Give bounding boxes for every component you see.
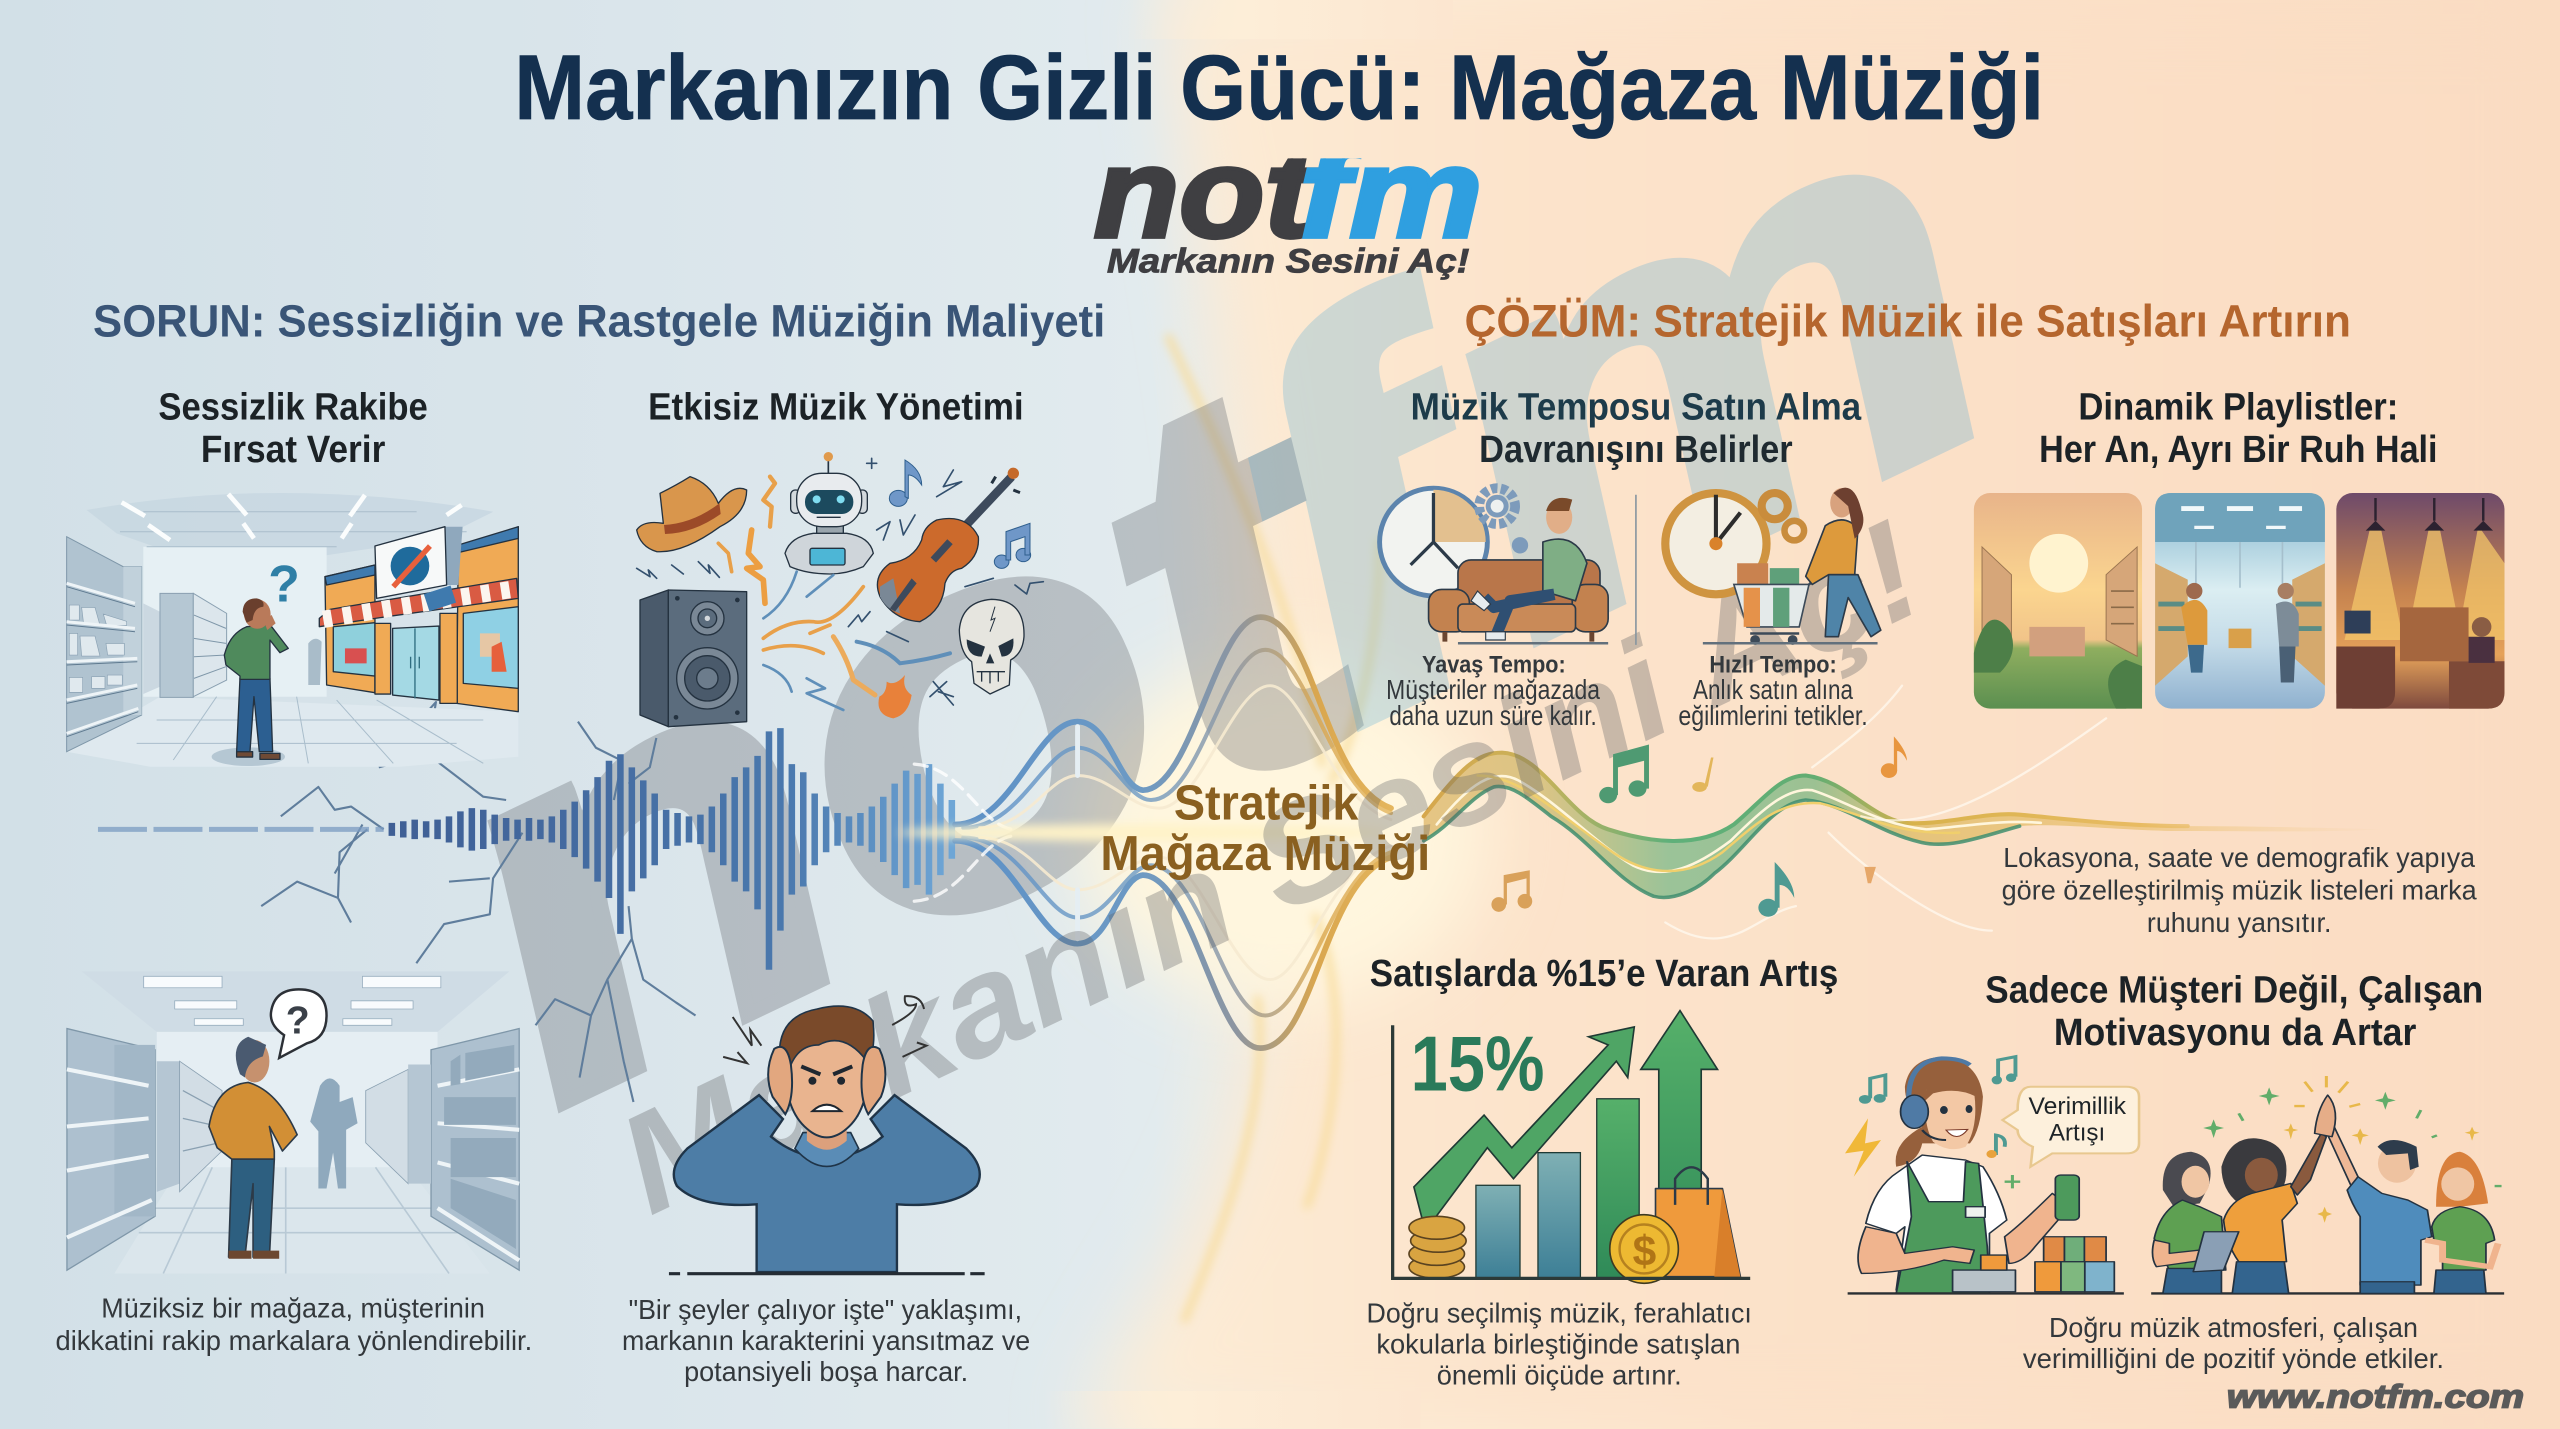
illustration: slow tempo bbox=[1380, 488, 1608, 643]
stat: 15%: 15% bbox=[1411, 1020, 1544, 1108]
text: employees caption: Doğru müzik atmosferi, çalışan bbox=[2049, 1312, 2418, 1343]
speech bubble: Artışı bbox=[2049, 1119, 2105, 1146]
icon: robot bbox=[785, 452, 873, 574]
axes bbox=[1393, 1025, 1750, 1278]
subheading: sales: Satışlarda %15’e Varan Artış bbox=[1370, 952, 1838, 994]
card: daytime store bbox=[2155, 493, 2325, 709]
icon: orange double note bbox=[1491, 870, 1532, 912]
text: fast tempo: eğilimlerini tetikler. bbox=[1678, 700, 1868, 731]
big up arrow bbox=[1641, 1011, 1718, 1278]
heading: problem: SORUN: Sessizliğin ve Rastgele Müziğin Maliyeti bbox=[93, 295, 1105, 346]
squiggles and sparks bbox=[637, 458, 1043, 710]
sparkles bbox=[2203, 1087, 2396, 1138]
text: ineffective music caption bbox=[622, 1294, 1030, 1387]
illustration: shopper looking at rival store: ? bbox=[268, 555, 300, 613]
subheading: employees: Sadece Müşteri Değil, Çalışan bbox=[1985, 968, 2483, 1010]
center label: Mağaza Müziği bbox=[1100, 827, 1430, 881]
central glow streak bbox=[898, 824, 1388, 841]
text: ineffective music caption: potansiyeli boşa harcar. bbox=[684, 1356, 968, 1387]
text: slow tempo: daha uzun süre kalır. bbox=[1389, 700, 1597, 731]
illustration: aisle with shopper: ? bbox=[286, 999, 310, 1042]
subheading: tempo: Davranışını Belirler bbox=[1479, 428, 1793, 470]
icon: cowboy hat bbox=[637, 477, 747, 552]
text: playlists caption: ruhunu yansıtır. bbox=[2147, 907, 2331, 938]
coin stack bbox=[1409, 1216, 1466, 1278]
text: silence caption: dikkatini rakip markalara yönlendirebilir. bbox=[56, 1325, 532, 1356]
heading: solution: ÇÖZÜM: Stratejik Müzik ile Satışları Artırın bbox=[1464, 295, 2351, 346]
text: employees caption bbox=[2023, 1312, 2444, 1374]
text: slow tempo bbox=[1386, 652, 1600, 731]
text: sales caption: önemli öiçüde artınr. bbox=[1437, 1359, 1682, 1390]
green and gold music ribbon bbox=[1424, 686, 2384, 938]
text: playlists caption: göre özelleştirilmiş müzik listeleri marka bbox=[2002, 875, 2477, 906]
title: Markanızın Gizli Gücü: Mağaza Müziği bbox=[514, 37, 2044, 139]
subheading: silence: Fırsat Verir bbox=[201, 428, 386, 470]
icon: violin bbox=[877, 468, 1020, 622]
text: silence caption bbox=[56, 1293, 532, 1356]
text: employees caption: verimilliğini de pozitif yönde etkiler. bbox=[2023, 1343, 2444, 1374]
card: evening store bbox=[2336, 493, 2504, 709]
watermark: large notfm logo: fm bbox=[1137, 0, 2077, 833]
text: fast tempo: Anlık satın alına bbox=[1693, 674, 1854, 705]
text: fast tempo bbox=[1678, 652, 1868, 731]
text: sales caption bbox=[1367, 1297, 1752, 1390]
bars bbox=[1476, 1099, 1639, 1278]
subheading: tempo bbox=[1411, 386, 1862, 470]
icon: gold faint note bbox=[1692, 758, 1713, 792]
icon: teal note bbox=[1758, 862, 1794, 917]
text: playlists caption bbox=[2002, 842, 2477, 938]
icon: speaker bbox=[640, 590, 747, 727]
chart: sales growth bbox=[1393, 1011, 1750, 1283]
logo: notfm: not bbox=[1094, 122, 1316, 264]
speech bubble bbox=[2002, 1087, 2139, 1167]
sound wave: bars bbox=[98, 728, 952, 970]
trend arrow bbox=[1414, 1027, 1634, 1231]
subheading: employees: Motivasyonu da Artar bbox=[2054, 1011, 2417, 1053]
shopping bag bbox=[1656, 1167, 1740, 1277]
logo: notfm bbox=[1093, 158, 1479, 280]
divider bbox=[1635, 495, 1637, 645]
logo: notfm: Markanın Sesini Aç! bbox=[1107, 243, 1469, 281]
music notes on wave bbox=[1491, 736, 1907, 917]
text: fast tempo: Hızlı Tempo: bbox=[1709, 652, 1837, 679]
text: sales caption: Doğru seçilmiş müzik, ferahlatıcı bbox=[1367, 1297, 1752, 1328]
logo: notfm: fm bbox=[1300, 122, 1482, 264]
text: slow tempo: Müşteriler mağazada bbox=[1386, 674, 1600, 705]
card: sunset store bbox=[1974, 493, 2142, 709]
icon: music notes bbox=[889, 460, 1031, 568]
watermark: large notfm logo bbox=[349, 0, 2077, 1209]
dollar coin bbox=[1610, 1215, 1678, 1283]
subheading: playlists: Dinamik Playlistler: bbox=[2078, 386, 2398, 428]
text: slow tempo: Yavaş Tempo: bbox=[1422, 652, 1566, 679]
cracks bbox=[261, 702, 696, 1102]
sound wave: strands morphing from blue to gold bbox=[914, 617, 1391, 1048]
website url: www.notfm.com bbox=[2227, 1377, 2524, 1414]
icon: skull bbox=[959, 599, 1024, 694]
subheading: ineffective music: Etkisiz Müzik Yönetimi bbox=[648, 386, 1024, 428]
illustration: chaotic music bbox=[637, 452, 1043, 727]
subheading: playlists: Her An, Ayrı Bir Ruh Hali bbox=[2039, 428, 2438, 470]
subheading: tempo: Müzik Temposu Satın Alma bbox=[1411, 386, 1862, 428]
subheading: playlists bbox=[2039, 386, 2438, 470]
center label: Stratejik bbox=[1174, 777, 1359, 831]
illustration: annoyed man covering ears bbox=[669, 996, 985, 1274]
icon: orange note bbox=[1881, 736, 1907, 778]
center label bbox=[1100, 777, 1430, 881]
speech bubble: Verimillik bbox=[2028, 1092, 2126, 1119]
icon: flame bbox=[878, 675, 912, 718]
text: playlists caption: Lokasyona, saate ve demografik yapıya bbox=[2003, 842, 2476, 873]
icon: small note bbox=[1864, 867, 1876, 883]
subheading: silence: Sessizlik Rakibe bbox=[158, 386, 428, 428]
watermark: large notfm logo: not bbox=[349, 267, 1459, 1209]
subheading: employees bbox=[1985, 968, 2483, 1053]
text: silence caption: Müziksiz bir mağaza, müşterinin bbox=[101, 1293, 485, 1324]
illustration: aisle with shopper bbox=[67, 971, 519, 1273]
illustration: fast tempo bbox=[1665, 488, 1881, 645]
text: ineffective music caption: "Bir şeyler çalıyor işte" yaklaşımı, bbox=[629, 1294, 1022, 1325]
illustration: team high five bbox=[2151, 1076, 2504, 1293]
icon: green double note bbox=[1599, 744, 1649, 803]
text: ineffective music caption: markanın karakterini yansıtmaz ve bbox=[622, 1325, 1030, 1356]
watermark: tagline: Markanın Sesini Aç! bbox=[595, 490, 1945, 1243]
dollar coin: $ bbox=[1633, 1227, 1656, 1274]
text: sales caption: kokularla birleştiğinde satışlan bbox=[1376, 1328, 1740, 1359]
subheading: silence bbox=[158, 386, 428, 470]
illustration: shopper looking at rival store bbox=[67, 493, 518, 767]
illustration: employee with headset bbox=[1845, 1057, 2139, 1293]
